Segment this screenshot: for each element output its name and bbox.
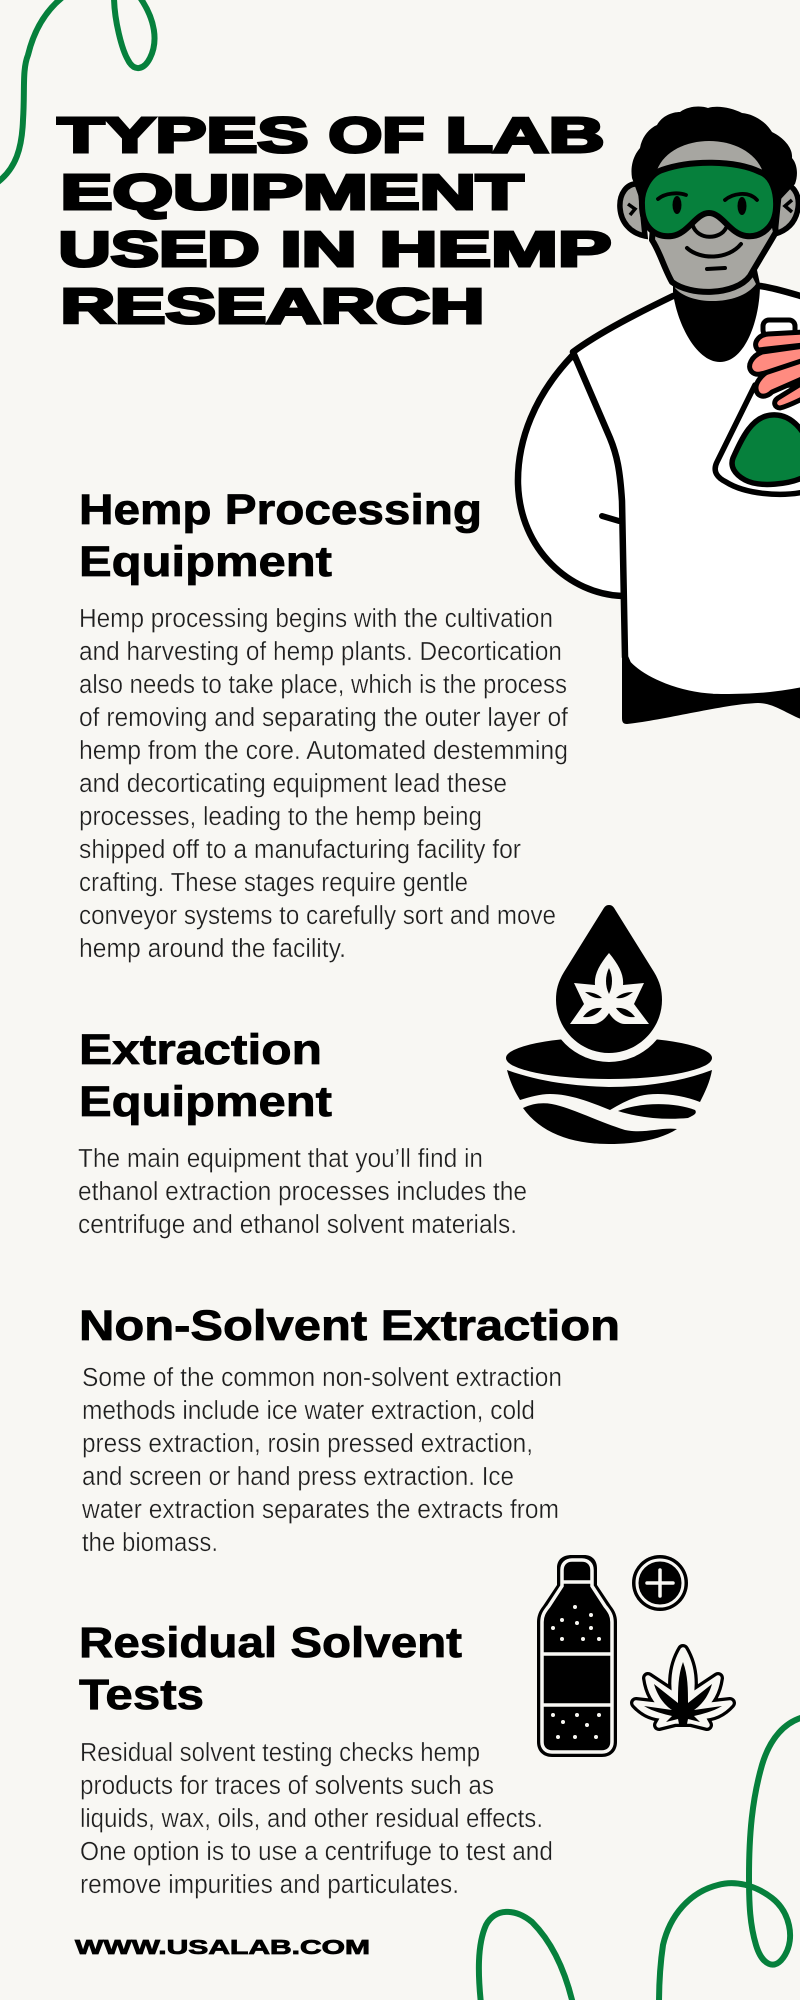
heading: Equipment <box>79 538 332 586</box>
body text: crafting. These stages require gentle <box>79 869 468 897</box>
body text: hemp around the facility. <box>79 935 346 963</box>
body text: and harvesting of hemp plants. Decortication <box>79 638 562 666</box>
coat hem shadow <box>622 658 800 724</box>
body text: press extraction, rosin pressed extraction, <box>82 1430 533 1458</box>
title: RESEARCH <box>60 280 484 334</box>
neck <box>672 272 756 301</box>
body text: One option is to use a centrifuge to test and <box>80 1838 553 1866</box>
section: Extraction Equipment <box>78 1026 527 1239</box>
body text: the biomass. <box>82 1529 218 1557</box>
drop <box>556 905 662 1053</box>
body text: of removing and separating the outer layer of <box>79 704 569 732</box>
title: OF <box>328 109 424 163</box>
section: Residual Solvent Tests <box>79 1619 553 1899</box>
body text <box>78 1145 527 1239</box>
title: HEMP <box>380 223 612 277</box>
scientist arm <box>518 356 640 596</box>
bowl body <box>507 1070 712 1110</box>
face features <box>687 226 741 269</box>
decorative green curve: bottom centre <box>479 1912 573 2000</box>
body text: Hemp processing begins with the cultivation <box>79 605 553 633</box>
icon: plus circle <box>632 1555 688 1611</box>
hemp flower <box>570 953 649 1024</box>
title <box>58 109 612 334</box>
body text: centrifuge and ethanol solvent materials. <box>78 1211 517 1239</box>
goggles <box>642 163 776 236</box>
icon: bottle <box>537 1555 617 1757</box>
title: EQUIPMENT <box>60 166 524 220</box>
body text: Some of the common non-solvent extraction <box>82 1364 562 1392</box>
body text: and decorticating equipment lead these <box>79 770 507 798</box>
body text: hemp from the core. Automated destemming <box>79 737 568 765</box>
icon: hemp leaf <box>636 1650 730 1725</box>
body text: methods include ice water extraction, cold <box>82 1397 535 1425</box>
heading: Extraction <box>79 1026 322 1074</box>
body text: liquids, wax, oils, and other residual effects. <box>80 1805 543 1833</box>
body text: also needs to take place, which is the process <box>79 671 567 699</box>
decorative green line: top left curve <box>0 0 64 182</box>
body text: products for traces of solvents such as <box>80 1772 494 1800</box>
heading <box>79 1026 332 1126</box>
heading: Hemp Processing <box>79 486 482 534</box>
decorative green loop: bottom right <box>659 1717 800 2000</box>
face <box>652 140 776 292</box>
body text: Residual solvent testing checks hemp <box>80 1739 480 1767</box>
hair <box>631 107 797 200</box>
body text: shipped off to a manufacturing facility for <box>79 836 521 864</box>
section: Hemp Processing Equipment <box>79 486 569 963</box>
ears <box>620 184 798 236</box>
body text <box>80 1739 553 1899</box>
scientist lab coat <box>573 286 800 697</box>
section: Non-Solvent Extraction <box>79 1302 620 1557</box>
body text: ethanol extraction processes includes the <box>78 1178 527 1206</box>
title: USED <box>58 223 260 277</box>
body text: water extraction separates the extracts from <box>81 1496 559 1524</box>
hand holding flask <box>750 332 800 408</box>
bowl base <box>523 1103 677 1144</box>
body text: and screen or hand press extraction. Ice <box>82 1463 514 1491</box>
body text <box>79 605 569 963</box>
body text: The main equipment that you’ll find in <box>78 1145 483 1173</box>
icon: hemp oil drop over bowl <box>506 905 712 1144</box>
website footer: WWW.USALAB.COM <box>75 1937 370 1959</box>
decorative green loop: top <box>114 0 155 68</box>
heading: Non-Solvent Extraction <box>79 1302 620 1350</box>
drop halo <box>547 938 671 1062</box>
title: TYPES <box>58 109 308 163</box>
forehead fill <box>657 141 763 180</box>
black collar shirt <box>673 270 760 362</box>
heading: Equipment <box>79 1078 332 1126</box>
heading <box>79 486 482 586</box>
heading: Residual Solvent <box>79 1619 462 1667</box>
flask <box>715 320 800 494</box>
body text <box>81 1364 562 1557</box>
heading <box>79 1619 462 1719</box>
coat fold <box>602 516 619 521</box>
body text: processes, leading to the hemp being <box>79 803 482 831</box>
heading: Tests <box>79 1671 204 1719</box>
title: LAB <box>446 109 604 163</box>
title: IN <box>280 223 356 277</box>
illustration: scientist holding a flask <box>518 107 800 724</box>
body text: conveyor systems to carefully sort and move <box>79 902 556 930</box>
bowl inner leaf <box>618 1104 696 1119</box>
bowl rim <box>506 1037 712 1079</box>
body text: remove impurities and particulates. <box>80 1871 459 1899</box>
